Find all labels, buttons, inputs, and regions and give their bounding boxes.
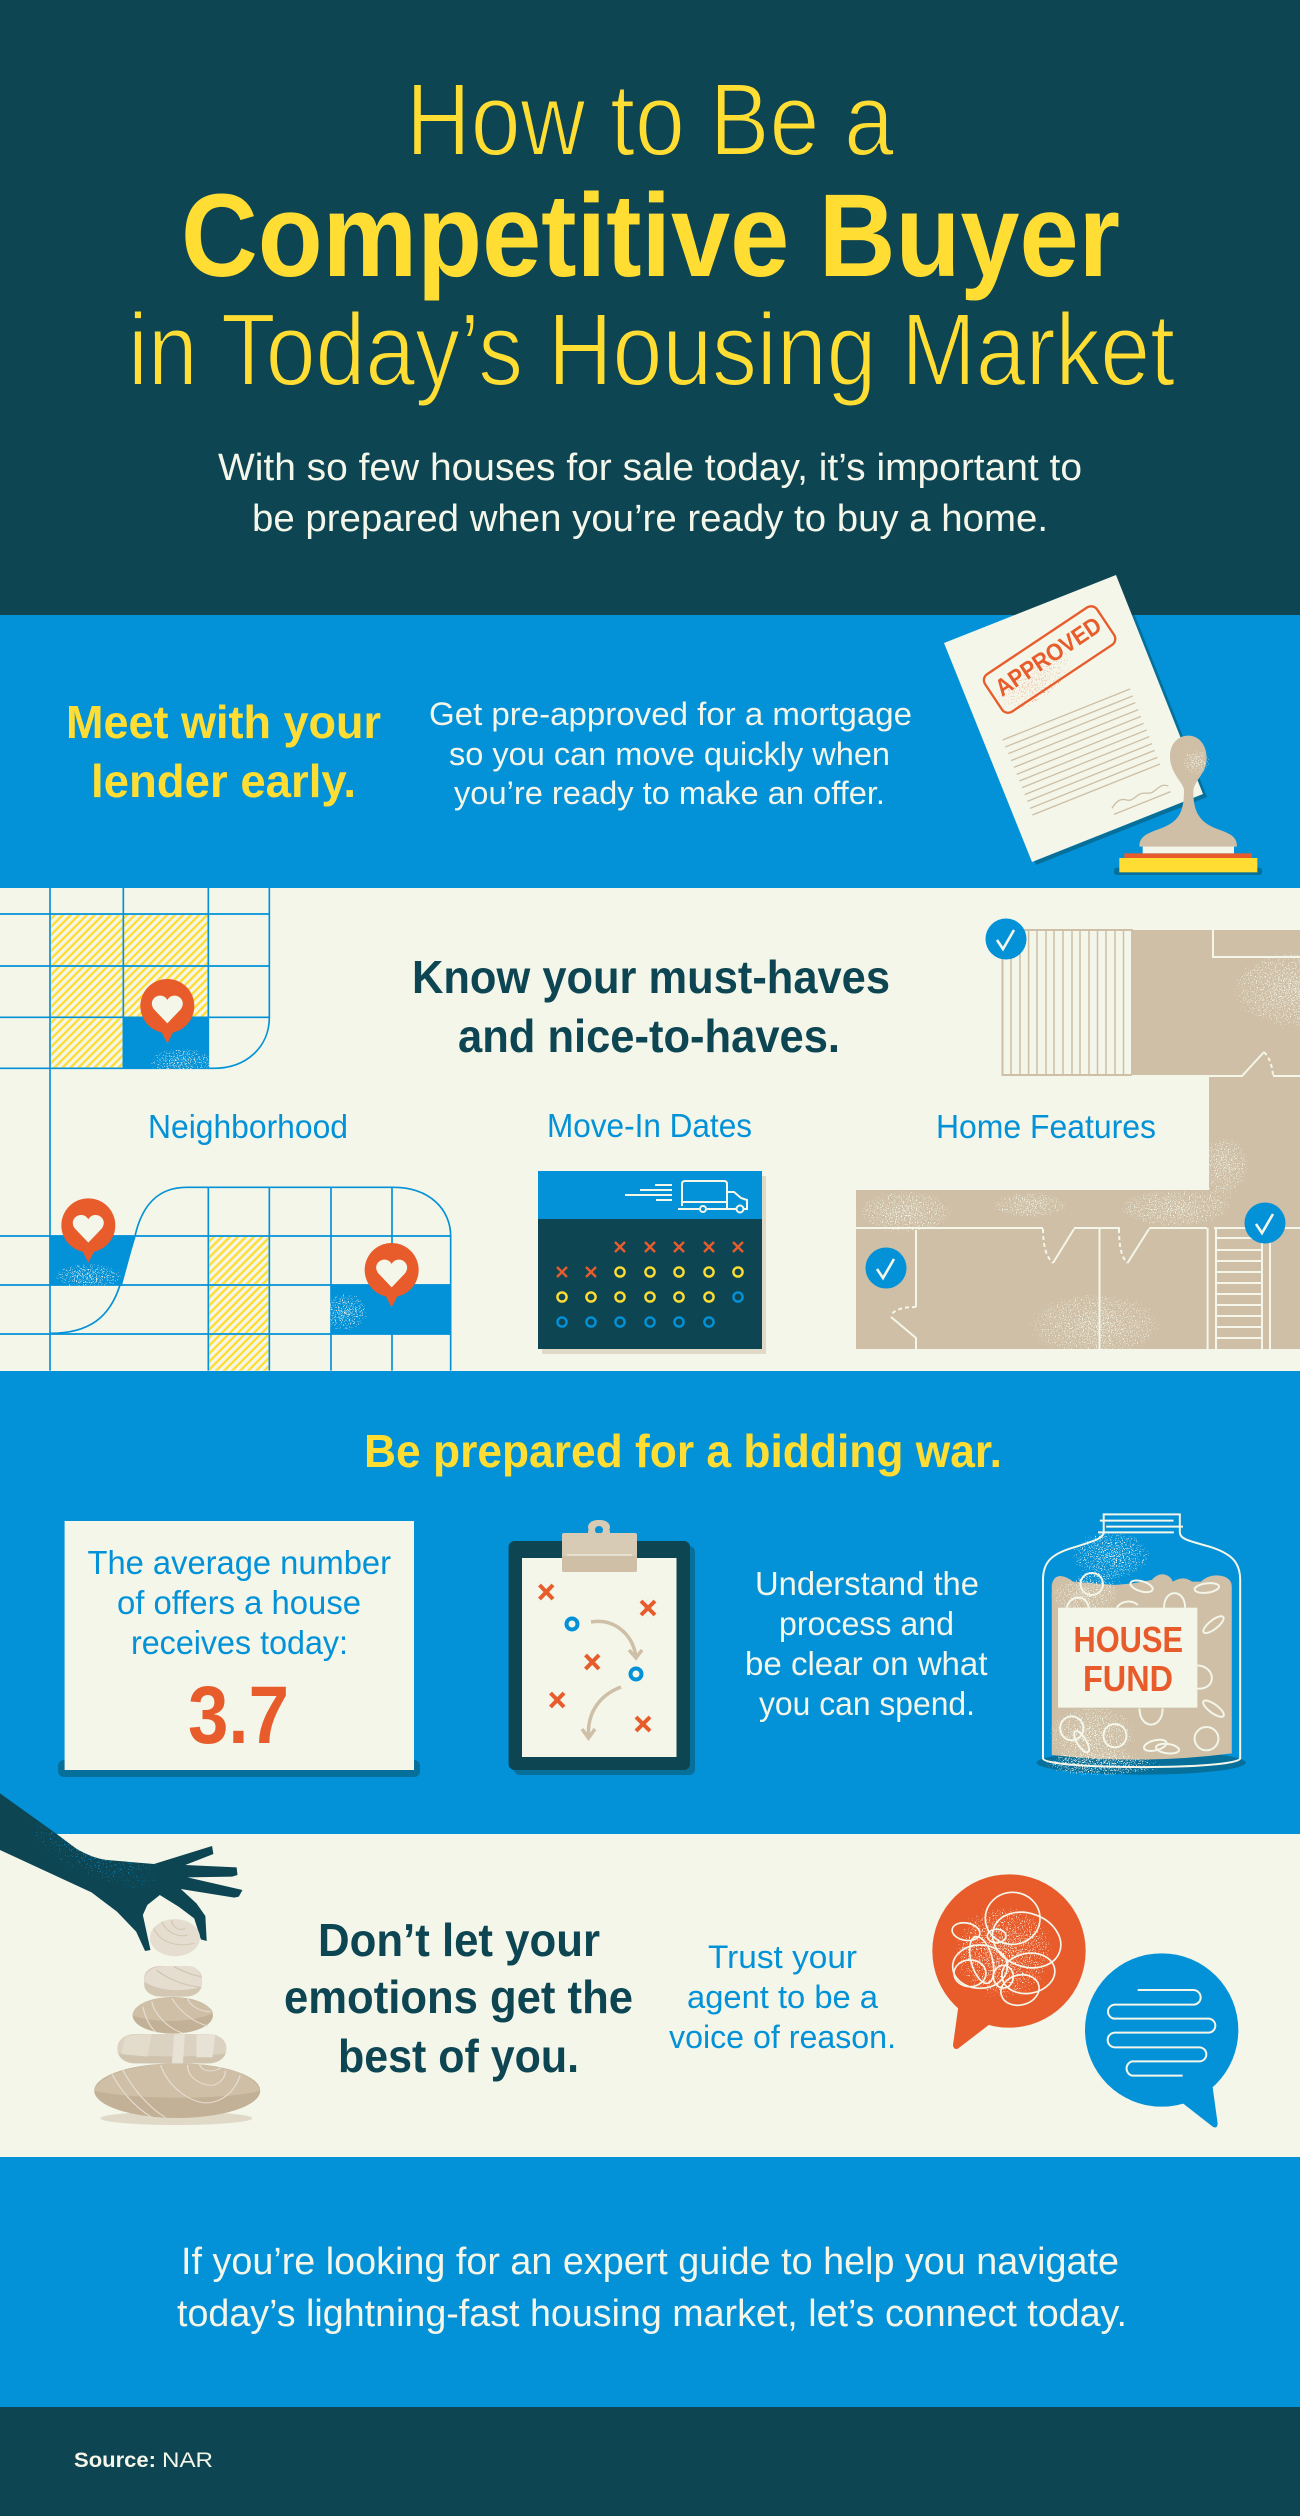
texture: floor specks (830, 928, 1300, 1375)
heading: meet with your lender early: lender early. (91, 755, 356, 807)
texture: map specks (33, 1040, 381, 1342)
text: get pre-approved: you’re ready to make an offer. (454, 775, 885, 811)
heading: emotions: Don’t let your (318, 1914, 600, 1966)
text: closing statement: today’s lightning-fast housing market, let’s connect today. (177, 2293, 1127, 2335)
text: trust your agent (669, 1939, 896, 2055)
texture: stamp knob (1174, 742, 1218, 782)
map: bottom neighborhood (0, 1187, 451, 1371)
heading: emotions (284, 1914, 633, 2082)
heading: emotions: emotions get the (284, 1971, 633, 2023)
subtitle: With so few houses for sale today, it’s important to (218, 447, 1082, 489)
panel: meet with your lender (0, 575, 1300, 888)
card text: of offers a house (117, 1584, 361, 1621)
subtitle (218, 447, 1082, 540)
icon: calm speech bubble (1085, 1953, 1238, 2127)
subtitle: be prepared when you’re ready to buy a home. (252, 498, 1048, 540)
heading: emotions: best of you. (338, 2030, 579, 2082)
label: move-in dates: Move-In Dates (547, 1107, 752, 1144)
icon: tangled speech bubble (926, 1874, 1086, 2049)
panel: must-haves (0, 888, 1300, 1375)
panel: call to action (0, 2157, 1300, 2407)
card text: receives today: (131, 1624, 348, 1661)
text: understand the process: process and (779, 1605, 954, 1642)
texture: jar specks (1015, 1517, 1195, 1783)
marks: yellow dates (557, 1267, 743, 1302)
source: NAR (162, 2449, 213, 2472)
marks: blue dates (557, 1292, 743, 1327)
stat: 3.7: 3.7 (188, 1670, 289, 1761)
icon: moving truck (625, 1181, 747, 1212)
icon: clipboard playbook (509, 1520, 695, 1775)
icon: heart pin (140, 979, 194, 1043)
icon: approved document and stamp (944, 575, 1262, 875)
heading: must-haves: and nice-to-haves. (458, 1010, 840, 1062)
texture: bubble specks (926, 1878, 1082, 2026)
floor plan: home features (830, 918, 1300, 1375)
texture: hand specks (26, 1816, 159, 1891)
label: home features: Home Features (936, 1108, 1156, 1145)
label: house fund: FUND (1083, 1658, 1173, 1699)
icon: calendar (538, 1171, 766, 1354)
marks: booked dates (557, 1242, 743, 1277)
heading: must-haves: Know your must-haves (412, 951, 890, 1003)
card text (88, 1544, 391, 1661)
text: get pre-approved (429, 696, 912, 811)
icon: house fund jar (1015, 1514, 1246, 1783)
label: house fund: HOUSE (1074, 1619, 1183, 1660)
text: get pre-approved: so you can move quickly when (449, 736, 890, 772)
texture: stamp ink (955, 614, 1115, 748)
text: understand the process: Understand the (755, 1565, 979, 1602)
text: understand the process: be clear on what (745, 1645, 988, 1682)
title: Competitive Buyer (181, 170, 1120, 302)
text: trust your agent: Trust your (708, 1939, 857, 1975)
text: understand the process (745, 1565, 988, 1722)
text: closing statement (177, 2241, 1127, 2335)
text: understand the process: you can spend. (759, 1685, 975, 1722)
source (74, 2449, 213, 2472)
panel: footer (0, 2407, 1300, 2516)
source: Source: (74, 2449, 156, 2472)
label: house fund (1074, 1619, 1183, 1699)
map: top neighborhood (0, 888, 269, 1371)
title (128, 62, 1175, 407)
panel: bidding war (0, 1371, 1300, 1834)
card text: The average number (88, 1544, 391, 1581)
icon: check stairs (1244, 1202, 1286, 1244)
heading: must-haves (412, 951, 890, 1062)
text: closing statement: If you’re looking for an expert guide to help you navigate (181, 2241, 1119, 2283)
heading: meet with your lender early (66, 696, 381, 807)
title: How to Be a (406, 62, 895, 177)
stamp text: APPROVED (990, 612, 1107, 702)
text: trust your agent: agent to be a (687, 1979, 878, 2015)
card: average offers (58, 1521, 420, 1777)
text: trust your agent: voice of reason. (669, 2019, 896, 2055)
panel: emotions (0, 1756, 1300, 2157)
icon: check deck (986, 918, 1026, 960)
heading: meet with your lender early: Meet with your (66, 696, 381, 748)
panel: header (0, 0, 1300, 615)
title: in Today’s Housing Market (128, 292, 1175, 407)
illustration: hand (0, 1794, 242, 1951)
heading: bidding war: Be prepared for a bidding war. (364, 1425, 1002, 1477)
icon: heart pin left (61, 1198, 115, 1263)
text: get pre-approved: Get pre-approved for a mortgage (429, 696, 912, 732)
icon: heart pin right (365, 1243, 419, 1307)
label: neighborhood: Neighborhood (148, 1108, 348, 1145)
icon: check entry (866, 1248, 906, 1288)
illustration: stacked stones (94, 1919, 260, 2125)
